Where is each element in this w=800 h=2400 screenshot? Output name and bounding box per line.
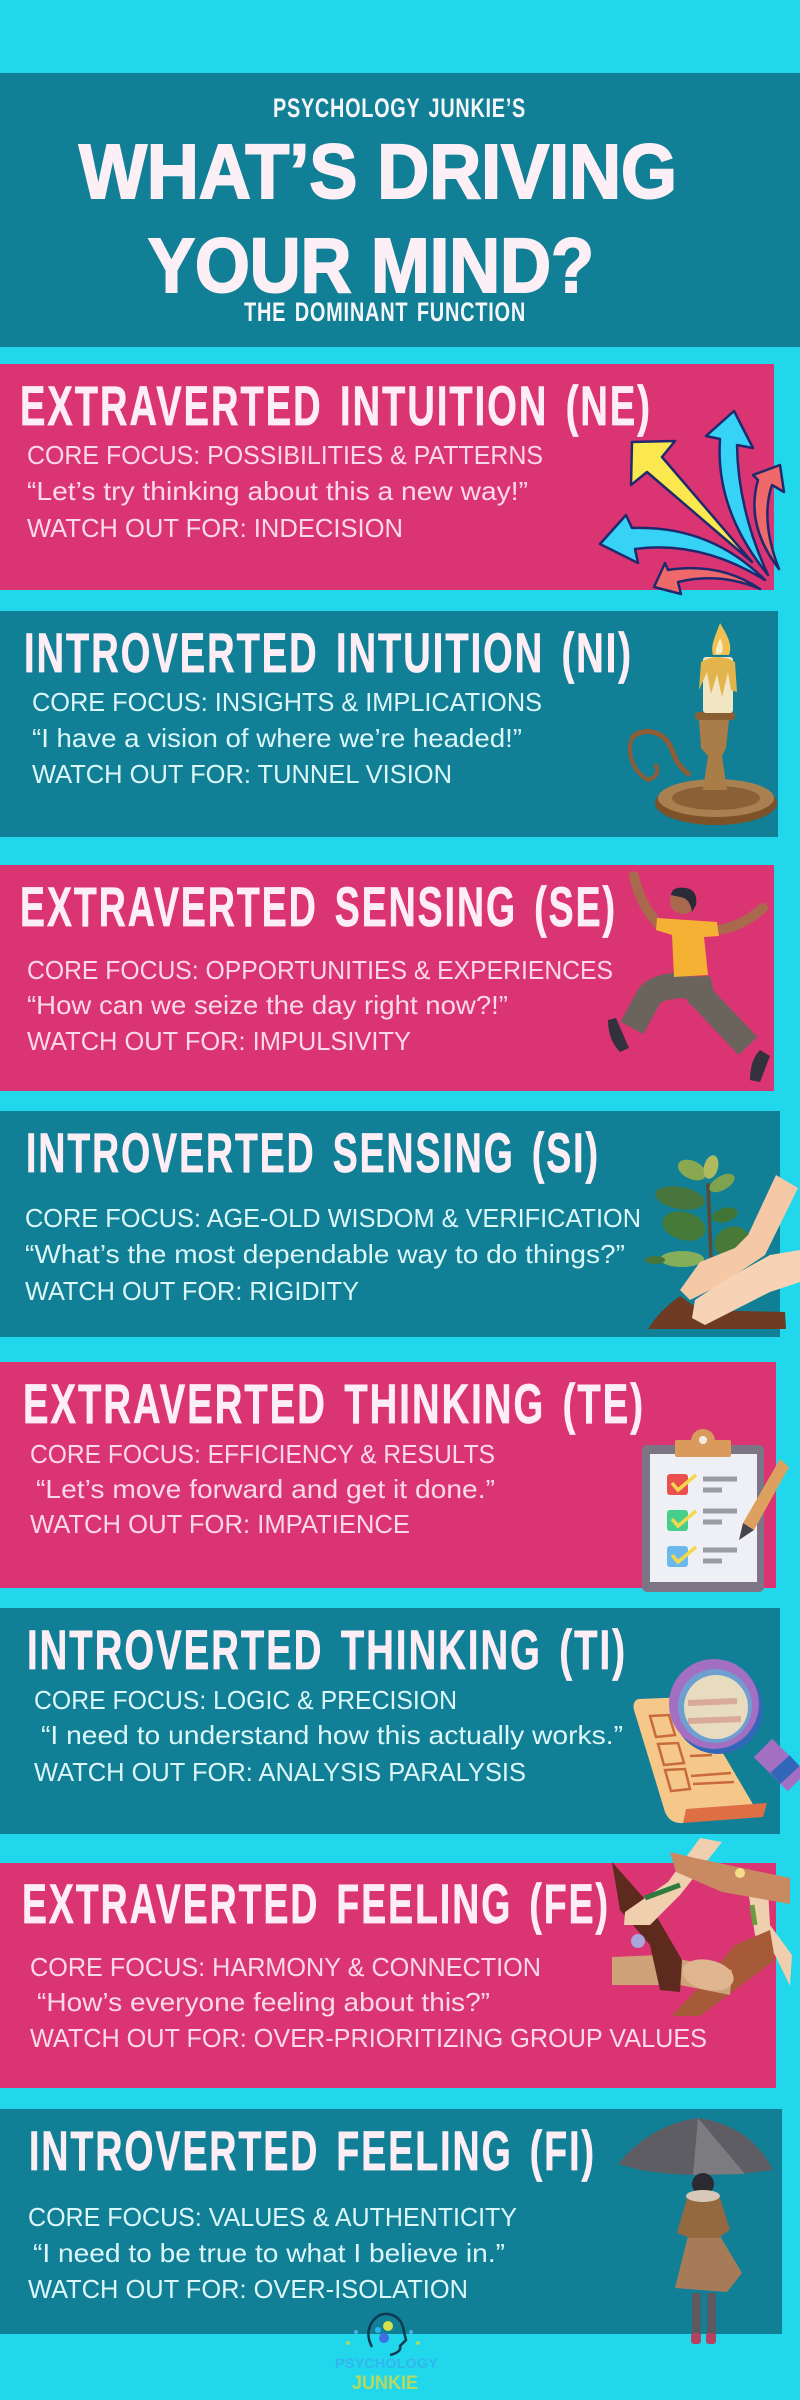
header banner <box>0 73 800 347</box>
text block: Te details: “Let’s move forward and get it done.” <box>36 1474 495 1504</box>
icon: candle <box>630 623 777 825</box>
text block: Ni details: “I have a vision of where we’re headed!” <box>32 723 522 753</box>
kicker: brand name: PSYCHOLOGY JUNKIE’S <box>273 93 526 123</box>
icon: jumping person <box>608 876 770 1082</box>
title <box>79 129 677 309</box>
text block: Te details: CORE FOCUS: EFFICIENCY & RESULTS <box>30 1439 495 1469</box>
title: YOUR MIND? <box>148 223 594 309</box>
icon: hands planting seedling <box>645 1154 800 1329</box>
text block: Se details <box>27 955 613 1056</box>
panel: introverted intuition <box>0 611 778 837</box>
text block: Ne details: CORE FOCUS: POSSIBILITIES & PATTERNS <box>27 440 543 470</box>
text block: Ni details <box>32 687 542 789</box>
text block: Fe details <box>30 1952 707 2053</box>
logo wordmark: JUNKIE <box>352 2373 418 2394</box>
text block: Se details: WATCH OUT FOR: IMPULSIVITY <box>27 1026 411 1056</box>
text block: Ni details: CORE FOCUS: INSIGHTS & IMPLICATIONS <box>32 687 542 717</box>
text block: Fe details: WATCH OUT FOR: OVER-PRIORITIZING GROUP VALUES <box>30 2023 707 2053</box>
text block: Te details <box>30 1439 495 1539</box>
icon: head with puzzle pieces <box>346 2314 420 2355</box>
text block: Ne details: “Let’s try thinking about this a new way!” <box>27 476 528 506</box>
panel: introverted thinking <box>0 1608 797 1834</box>
panel: introverted feeling <box>0 2109 782 2344</box>
icon: clipboard checklist <box>642 1429 789 1592</box>
text block: Fe details: “How’s everyone feeling about this?” <box>37 1987 490 2017</box>
text block: Si details: CORE FOCUS: AGE-OLD WISDOM & VERIFICATION <box>25 1203 641 1233</box>
icon: person under umbrella <box>618 2118 773 2344</box>
icon: circle of joined hands <box>612 1838 792 2016</box>
panel: extraverted sensing <box>0 865 774 1091</box>
text block: Fi details: “I need to be true to what I believe in.” <box>33 2238 505 2268</box>
logo: Psychology Junkie <box>335 2314 439 2394</box>
panel: extraverted feeling <box>0 1838 792 2088</box>
text block: Ne details <box>27 440 543 543</box>
text block: Fe details: CORE FOCUS: HARMONY & CONNECTION <box>30 1952 541 1982</box>
text block: Si details <box>25 1203 641 1306</box>
text block: Te details: WATCH OUT FOR: IMPATIENCE <box>30 1509 410 1539</box>
text block: Ti details: “I need to understand how this actually works.” <box>41 1720 623 1750</box>
text block: Se details: CORE FOCUS: OPPORTUNITIES & EXPERIENCES <box>27 955 613 985</box>
text block: Se details: “How can we seize the day right now?!” <box>27 990 508 1020</box>
text block: Si details: “What’s the most dependable way to do things?” <box>25 1239 625 1269</box>
text block: Ti details: WATCH OUT FOR: ANALYSIS PARALYSIS <box>34 1757 526 1787</box>
text block: Fi details: CORE FOCUS: VALUES & AUTHENTICITY <box>28 2202 517 2232</box>
text block: Ti details <box>34 1685 623 1787</box>
text block: Ne details: WATCH OUT FOR: INDECISION <box>27 513 403 543</box>
icon: diverging arrows <box>600 411 784 594</box>
panel: extraverted thinking <box>0 1362 789 1592</box>
text block: Fi details <box>28 2202 517 2304</box>
icon: magnifying glass over checklist <box>634 1659 797 1823</box>
text block: Fi details: WATCH OUT FOR: OVER-ISOLATION <box>28 2274 468 2304</box>
panel: introverted sensing <box>0 1111 800 1337</box>
text block: Ti details: CORE FOCUS: LOGIC & PRECISION <box>34 1685 457 1715</box>
text block: Ni details: WATCH OUT FOR: TUNNEL VISION <box>32 759 452 789</box>
text block: Si details: WATCH OUT FOR: RIGIDITY <box>25 1276 359 1306</box>
subtitle: THE DOMINANT FUNCTION <box>244 297 526 327</box>
panel: extraverted intuition <box>0 364 784 594</box>
logo wordmark <box>335 2355 439 2394</box>
logo wordmark: PSYCHOLOGY <box>335 2355 439 2371</box>
title: WHAT’S DRIVING <box>79 129 677 215</box>
